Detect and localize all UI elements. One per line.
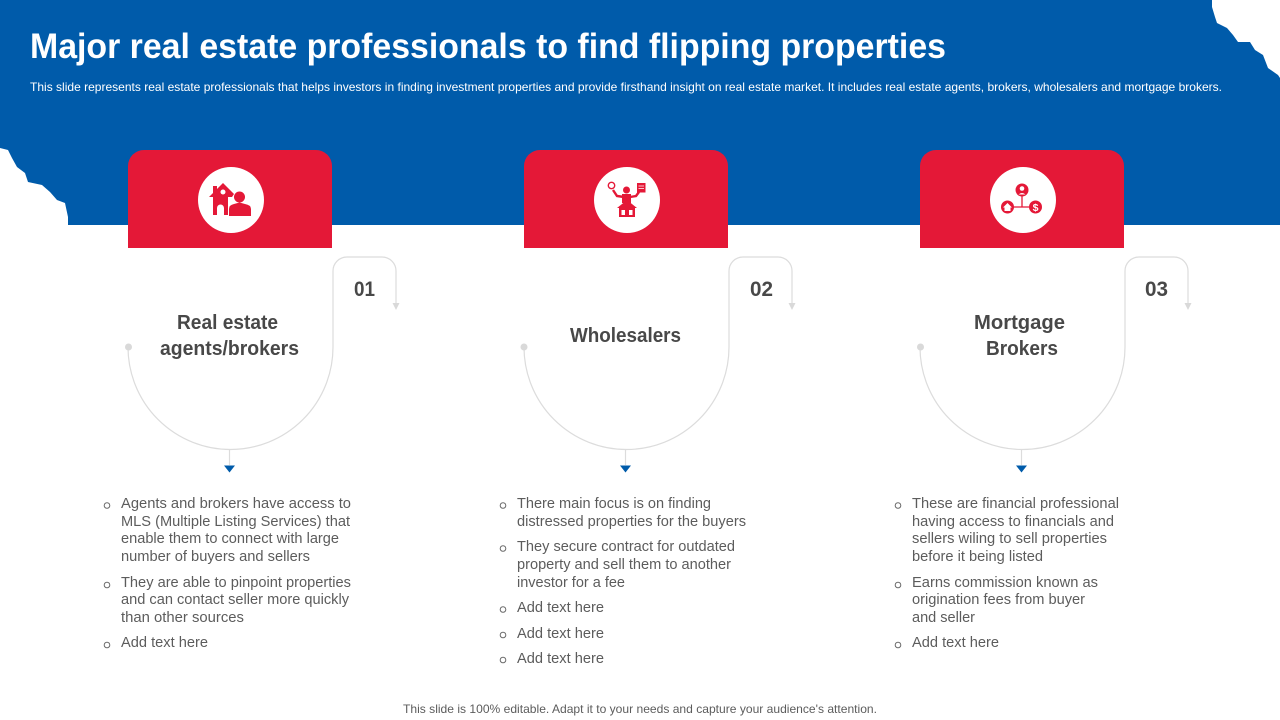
footer note: This slide is 100% editable. Adapt it to your needs and capture your audience's attention. xyxy=(403,702,877,716)
bullet list: Earns commission known as xyxy=(912,575,1098,591)
header background band xyxy=(0,0,1280,225)
heading: Real estate xyxy=(177,312,278,334)
bullet list: Add text here xyxy=(517,600,604,616)
icon: wholesaler with house and document xyxy=(594,167,660,233)
number: 03 xyxy=(1145,278,1168,301)
bullet list: enable them to connect with large xyxy=(121,531,339,547)
heading: Wholesalers xyxy=(570,325,681,347)
bullet list: having access to financials and xyxy=(912,514,1114,530)
bullet list: number of buyers and sellers xyxy=(121,549,310,565)
subtitle description: This slide represents real estate professionals that helps investors in finding investment properties and provide firsthand insight on real estate market. It includes real estate agents, brokers, wholesalers and mortgage brokers. xyxy=(30,80,1222,94)
bullet list: than other sources xyxy=(121,610,244,626)
bullet list: Agents and brokers have access to xyxy=(121,496,351,512)
bullet list: property and sell them to another xyxy=(517,557,731,573)
icon card xyxy=(920,150,1124,248)
title: Major real estate professionals to find flipping properties xyxy=(30,27,946,66)
heading xyxy=(974,312,1065,360)
panel: wholesalers xyxy=(500,150,796,667)
bullet list: They secure contract for outdated xyxy=(517,539,735,555)
bullet list: distressed properties for the buyers xyxy=(517,514,746,530)
bullet list: investor for a fee xyxy=(517,575,625,591)
bullet list: sellers wiling to sell properties xyxy=(912,531,1107,547)
bullet list: and seller xyxy=(912,610,975,626)
panel: real estate agents/brokers xyxy=(104,150,399,651)
bullet list: Add text here xyxy=(517,626,604,642)
heading: Mortgage xyxy=(974,312,1065,334)
bullet list: MLS (Multiple Listing Services) that xyxy=(121,514,350,530)
heading xyxy=(160,312,299,360)
bullet list: Add text here xyxy=(121,635,208,651)
bullet list: and can contact seller more quickly xyxy=(121,592,350,608)
bullet list: before it being listed xyxy=(912,549,1043,565)
heading: agents/brokers xyxy=(160,338,299,360)
heading: Brokers xyxy=(986,338,1058,360)
panel: mortgage brokers xyxy=(895,150,1192,651)
bullet list: Add text here xyxy=(517,651,604,667)
bullet list: There main focus is on finding xyxy=(517,496,711,512)
icon card xyxy=(128,150,332,248)
icon: house and agent xyxy=(198,167,264,233)
number: 02 xyxy=(750,278,773,301)
connector curve xyxy=(520,257,796,472)
bullet list: They are able to pinpoint properties xyxy=(121,575,351,591)
number: 01 xyxy=(354,278,375,301)
bullet list xyxy=(895,496,1119,651)
icon card xyxy=(524,150,728,248)
bullet list: Add text here xyxy=(912,635,999,651)
bullet list: These are financial professional xyxy=(912,496,1119,512)
bullet list xyxy=(104,496,351,651)
bullet list xyxy=(500,496,746,667)
connector curve xyxy=(125,257,400,472)
icon: agent, home and dollar network: $ xyxy=(1033,202,1039,214)
icon: agent, home and dollar network xyxy=(990,167,1056,233)
bullet list: origination fees from buyer xyxy=(912,592,1085,608)
connector curve xyxy=(917,257,1192,472)
